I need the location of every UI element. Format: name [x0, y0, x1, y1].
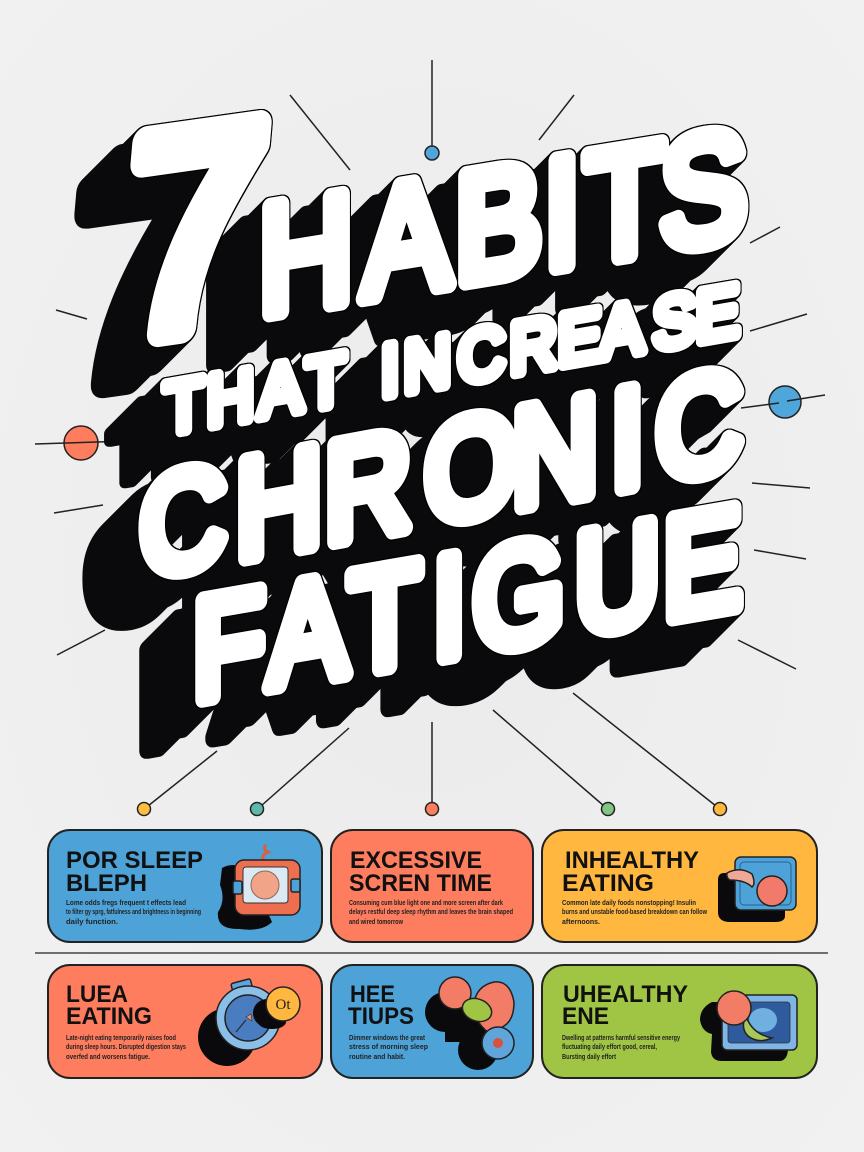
icon: stopwatch: [198, 979, 300, 1066]
text block: during sleep hours. Disrupted digestion stays: [66, 1042, 186, 1051]
text block: afternoons.: [562, 917, 600, 926]
title line THAT INCREASE: THAT INCREASE: [164, 270, 739, 450]
text block: to filter gy sprg, fatfulness and brightness in beginning: [66, 907, 201, 916]
title: [111, 63, 747, 731]
text block: and wired tomorrow: [349, 917, 403, 926]
title line HABITS: HABITS: [259, 97, 747, 348]
heading: EATING: [66, 1003, 152, 1030]
icon: tray with food: [718, 857, 796, 922]
text block: Bursting daily effort: [562, 1052, 616, 1061]
heading: EXCESSIVE: [350, 847, 482, 874]
text block: Common late daily foods nonstopping! Insulin: [562, 898, 696, 907]
icon: tray with fruit: [700, 991, 797, 1061]
heading: BLEPH: [66, 870, 147, 897]
panel: hee tiups: [331, 965, 533, 1078]
icon label: Ot: [276, 997, 291, 1013]
panel: unhealthy energy: [542, 965, 817, 1078]
text block: routine and habit.: [349, 1052, 405, 1061]
panel: poor sleep: [48, 830, 322, 942]
title line FATIGUE: FATIGUE: [193, 476, 742, 731]
heading: LUEA: [66, 981, 128, 1008]
title line CHRONIC: CHRONIC: [140, 339, 742, 607]
heading: ENE: [562, 1003, 609, 1030]
text block: Lome odds fregs frequent t effects lead: [66, 898, 186, 907]
text block: Late-night eating temporarily raises food: [66, 1033, 176, 1042]
text block: overfed and worsens fatigue.: [66, 1052, 150, 1061]
text block: Dimmer windows the great: [349, 1033, 425, 1042]
text block: daily function.: [66, 917, 118, 926]
text block: delays restful deep sleep rhythm and leaves the brain shaped: [349, 907, 513, 916]
text block: burns and unstable food-based breakdown can follow: [562, 907, 707, 916]
panel: excessive screen time: [331, 830, 533, 942]
title numeral 7: 7: [111, 63, 276, 399]
heading: TIUPS: [348, 1003, 414, 1030]
icon: food pile: [425, 977, 514, 1070]
heading: POR SLEEP: [66, 847, 203, 874]
panel: eating row two: [48, 965, 322, 1078]
heading: UHEALTHY: [563, 981, 688, 1008]
heading: EATING: [562, 870, 654, 897]
decorative rays and dots around title: [35, 60, 825, 816]
text block: Dwelling at patterns harmful sensitive energy: [562, 1033, 681, 1042]
heading: INHEALTHY: [565, 847, 699, 874]
panel: unhealthy eating: [542, 830, 817, 942]
heading: SCREN TIME: [349, 870, 492, 897]
text block: Consuming cum blue light one and more screen after dark: [349, 898, 504, 907]
text block: stress of morning sleep: [349, 1042, 428, 1051]
divider: [35, 952, 828, 954]
heading: HEE: [350, 981, 395, 1008]
icon: device with face: [218, 845, 300, 930]
text block: fluctuating daily effort good, cereal,: [562, 1042, 657, 1051]
